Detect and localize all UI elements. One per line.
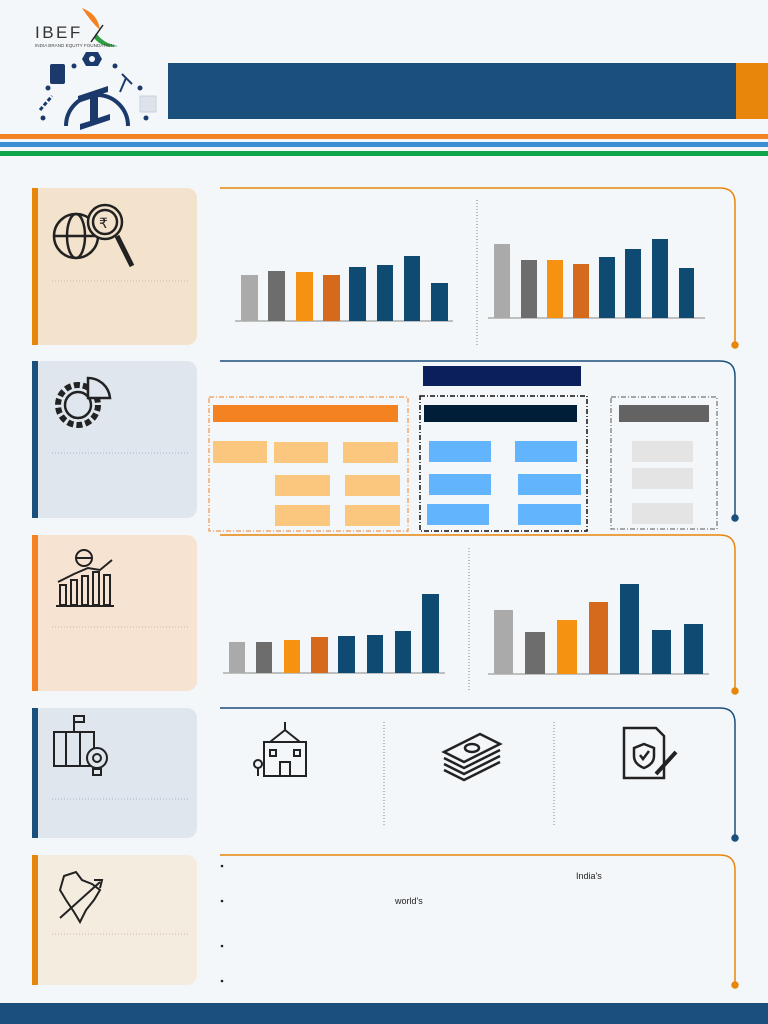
bullet list: India's	[576, 871, 602, 881]
group: orange	[209, 397, 408, 531]
panel 4: left card	[32, 708, 197, 838]
bar chart 3a	[223, 594, 445, 673]
icon: globe with magnifier	[54, 205, 132, 266]
connector 1	[220, 188, 738, 348]
title bar	[168, 63, 768, 119]
icon: document with shield and pen	[624, 728, 676, 778]
bullet list	[221, 865, 602, 982]
icon: growth chart with globe	[56, 550, 114, 606]
bar chart 1a	[235, 256, 453, 321]
logo: IBEF: INDIA BRAND EQUITY FOUNDATION	[35, 43, 114, 48]
icon: India map with arrow	[60, 872, 102, 922]
table header	[423, 366, 581, 386]
logo: IBEF	[35, 8, 118, 48]
logo: IBEF: IBEF	[35, 23, 83, 42]
icon: school building	[254, 722, 306, 776]
icon: government building with idea bulb	[54, 716, 107, 775]
panel 1: left card	[32, 188, 197, 345]
connector 3	[220, 535, 738, 694]
footer bar	[0, 1003, 768, 1024]
group: navy	[420, 396, 587, 531]
icon: gear with pie	[58, 378, 110, 425]
panel 5: left card	[32, 855, 197, 985]
icon: globe with magnifier: ₹	[99, 215, 108, 231]
bar chart 3b	[488, 584, 709, 674]
bar chart 1b	[488, 239, 705, 318]
connector 5	[220, 855, 738, 988]
connector 2	[220, 361, 738, 521]
panel 2: left card	[32, 361, 197, 518]
bullet list: world's	[394, 896, 423, 906]
group: grey	[611, 397, 717, 529]
icon: steel industry emblem	[40, 52, 156, 130]
connector 4	[220, 708, 738, 841]
icon: money stack	[444, 734, 500, 780]
panel 3: left card	[32, 535, 197, 691]
tricolour stripes	[0, 134, 768, 156]
